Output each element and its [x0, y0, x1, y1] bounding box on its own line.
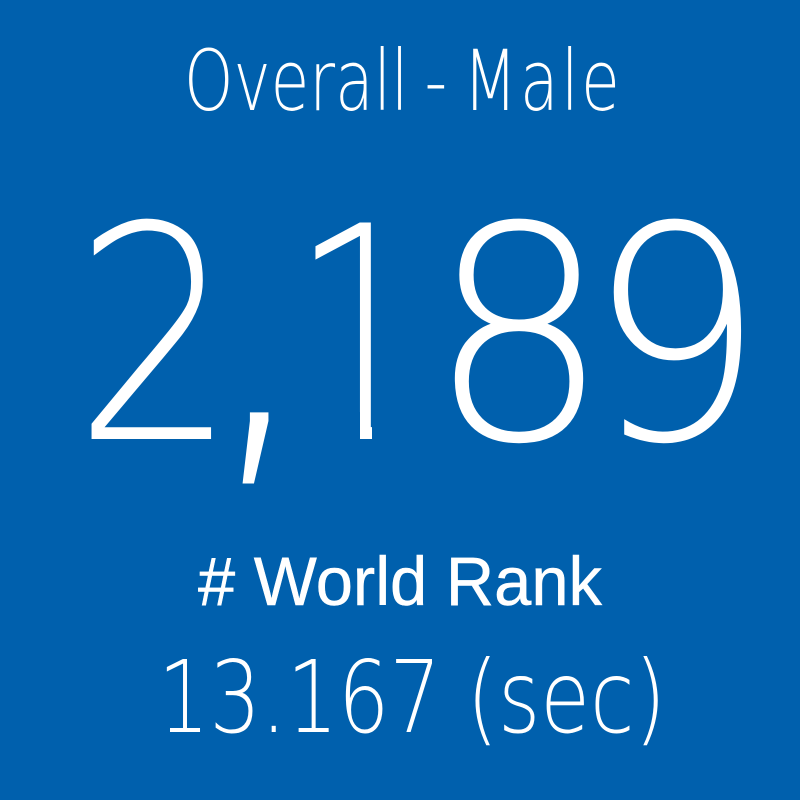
label: world rank: # World Rank — [198, 543, 602, 620]
time value: 13.167 (sec) — [158, 639, 666, 756]
big number: 8 — [428, 163, 610, 509]
big number: 1 — [291, 163, 433, 509]
big number: 2 — [74, 165, 237, 510]
big number: , — [200, 66, 319, 532]
title: Overall - Male — [184, 33, 622, 130]
big number: 9 — [586, 164, 766, 510]
big number — [74, 66, 766, 532]
